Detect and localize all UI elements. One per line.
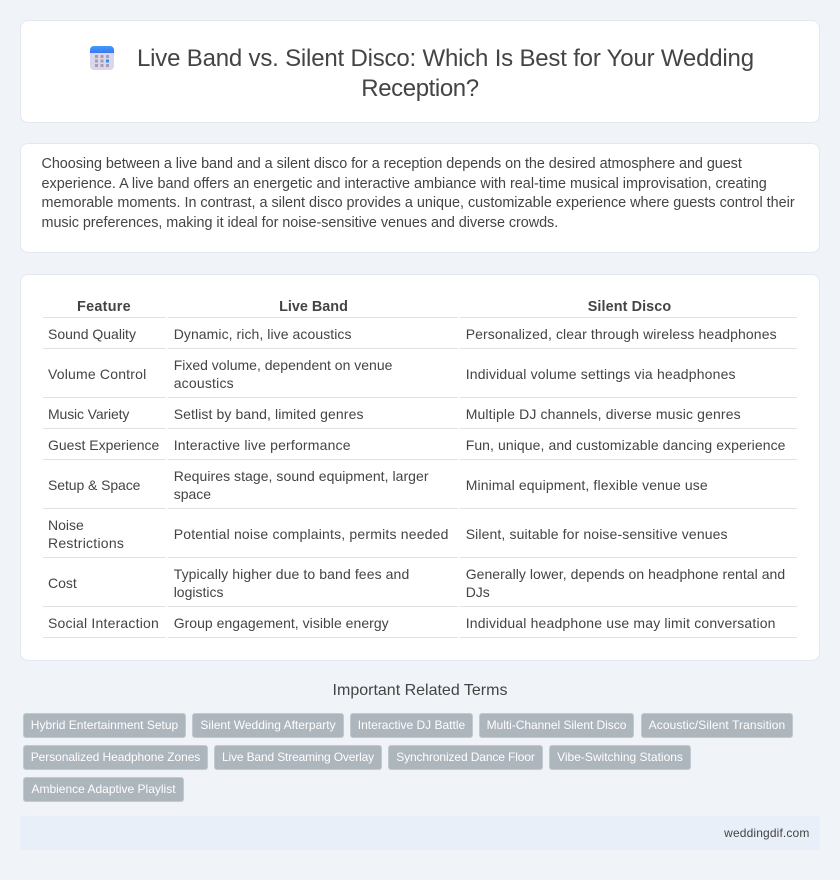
row: Music Variety: Setlist by band, limited genres <box>174 406 364 422</box>
tag list: related terms: Synchronized Dance Floor <box>396 750 535 764</box>
row: Noise Restrictions: Silent, suitable for noise-sensitive venues <box>466 526 728 542</box>
row: Sound Quality: Dynamic, rich, live acoustics <box>174 326 352 342</box>
row: Music Variety: Multiple DJ channels, diverse music genres <box>466 406 741 422</box>
tag list: related terms: Acoustic/Silent Transition <box>649 718 785 732</box>
table header <box>77 299 671 315</box>
row: Cost: Cost <box>48 575 77 591</box>
tag list: related terms: Multi-Channel Silent Disco <box>487 718 626 732</box>
table header: Silent Disco <box>588 299 671 315</box>
row: Volume Control: acoustics <box>174 375 234 391</box>
panel: comparison table <box>20 274 820 661</box>
row: Noise Restrictions: Noise <box>48 517 84 533</box>
row: Volume Control <box>48 357 736 391</box>
title <box>137 45 754 102</box>
tag list: related terms: Personalized Headphone Zones <box>31 750 200 764</box>
icon: calendar <box>90 46 114 70</box>
row: Guest Experience: Interactive live performance <box>174 437 351 453</box>
tag list: related terms: Interactive DJ Battle <box>358 718 465 732</box>
row: Guest Experience: Fun, unique, and customizable dancing experience <box>466 437 786 453</box>
row: Sound Quality <box>48 326 777 342</box>
row: Noise Restrictions: Restrictions <box>48 535 124 551</box>
row: Noise Restrictions: Potential noise complaints, permits needed <box>174 526 449 542</box>
row: Social Interaction: Individual headphone use may limit conversation <box>466 615 776 631</box>
row: Social Interaction: Group engagement, visible energy <box>174 615 389 631</box>
row: Social Interaction: Social Interaction <box>48 615 159 631</box>
tag list: related terms: Vibe-Switching Stations <box>557 750 683 764</box>
heading: related terms: Important Related Terms <box>333 682 507 699</box>
row: Volume Control: Volume Control <box>48 366 146 382</box>
row: Setup & Space: Minimal equipment, flexible venue use <box>466 477 708 493</box>
row: Setup & Space: space <box>174 486 211 502</box>
title: Reception? <box>361 75 479 102</box>
row: Sound Quality: Sound Quality <box>48 326 136 342</box>
table header: Feature <box>77 299 131 315</box>
row: Sound Quality: Personalized, clear through wireless headphones <box>466 326 777 342</box>
text block: introduction: Choosing between a live band and a silent disco for a reception depends on the desired atmosphere and guest <box>42 156 742 172</box>
text block: introduction: memorable moments. In contrast, a silent disco provides a unique, customizable experience where guests control their <box>42 195 795 211</box>
tag list: related terms: Hybrid Entertainment Setup <box>31 718 178 732</box>
row: Cost: DJs <box>466 584 490 600</box>
row: Cost: Generally lower, depends on headphone rental and <box>466 566 785 582</box>
tag list: related terms: Silent Wedding Afterparty <box>200 718 336 732</box>
row: Volume Control: Fixed volume, dependent on venue <box>174 357 392 373</box>
footer credit: weddingdif.com <box>724 826 810 840</box>
row: Volume Control: Individual volume settings via headphones <box>466 366 736 382</box>
row: Guest Experience: Guest Experience <box>48 437 159 453</box>
row: Guest Experience <box>48 437 786 453</box>
row: Setup & Space <box>48 468 708 502</box>
row: Music Variety <box>48 406 741 422</box>
tag list: related terms <box>23 713 793 802</box>
text block: introduction: experience. A live band offers an energetic and interactive ambiance with real-time musical improvisation, creating <box>42 176 767 192</box>
table header: Live Band <box>279 299 348 315</box>
row: Cost: logistics <box>174 584 223 600</box>
row: Setup & Space: Setup & Space <box>48 477 140 493</box>
row: Cost: Typically higher due to band fees and <box>174 566 409 582</box>
row: Noise Restrictions <box>48 517 728 551</box>
row: Setup & Space: Requires stage, sound equipment, larger <box>174 468 429 484</box>
text block: introduction: music preferences, making it ideal for noise-sensitive venues and diverse crowds. <box>42 214 558 230</box>
footer <box>20 816 820 850</box>
title: Live Band vs. Silent Disco: Which Is Best for Your Wedding <box>137 45 754 72</box>
tag list: related terms: Ambience Adaptive Playlist <box>31 782 176 796</box>
panel: introduction <box>20 143 820 253</box>
text block: introduction <box>42 156 795 230</box>
panel: title header <box>20 20 820 123</box>
row: Music Variety: Music Variety <box>48 406 129 422</box>
row: Social Interaction <box>48 615 776 631</box>
tag list: related terms: Live Band Streaming Overlay <box>222 750 374 764</box>
row: Cost <box>48 566 785 600</box>
